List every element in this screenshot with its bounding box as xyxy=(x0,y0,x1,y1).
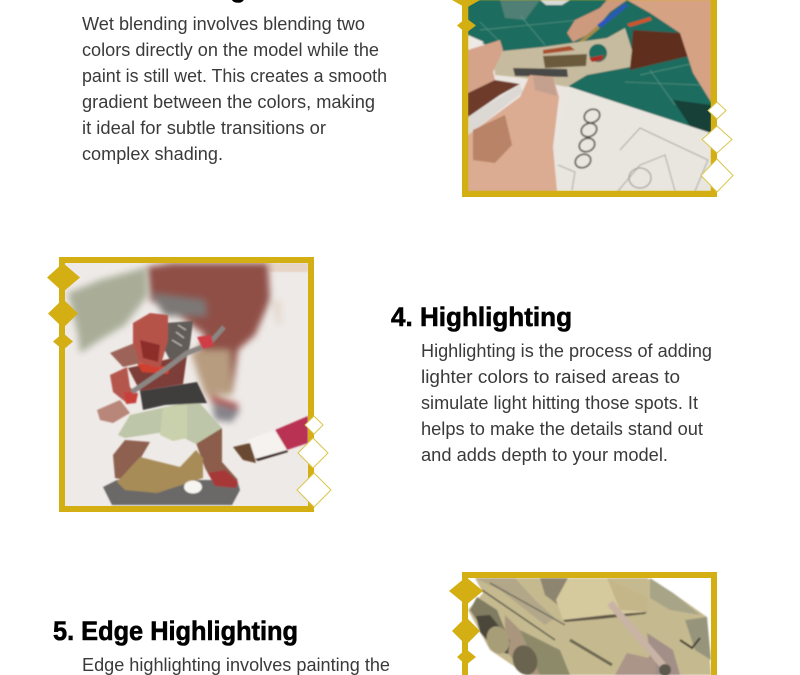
section 5 image: camouflaged tank xyxy=(449,572,717,675)
left arm xyxy=(110,367,138,404)
base xyxy=(103,480,240,505)
body text: highlighting: simulate light hitting those spots. It xyxy=(421,393,698,413)
body text: wet blending: complex shading. xyxy=(82,144,223,164)
instruction sheet details xyxy=(573,107,602,170)
left shoulder xyxy=(110,342,141,367)
deck lines xyxy=(482,590,555,640)
sword and arm xyxy=(132,327,224,392)
grass xyxy=(117,450,203,493)
body text: wet blending: gradient between the colors, making xyxy=(82,92,375,112)
stone xyxy=(184,480,202,494)
white diamonds xyxy=(297,416,331,507)
photo xyxy=(468,578,711,675)
body text: wet blending: colors directly on the model while the xyxy=(82,40,379,60)
cutting mat xyxy=(468,0,711,133)
gold frame xyxy=(59,257,314,512)
brush xyxy=(597,3,628,28)
section 3: wet blending text xyxy=(53,0,387,164)
section 4 image: painted miniature figure xyxy=(47,257,331,512)
paper scrap xyxy=(468,34,485,44)
body text: highlighting: Highlighting is the process of adding xyxy=(421,341,712,361)
section 3 image: hands painting model on cutting mat xyxy=(452,0,733,197)
craft knife xyxy=(468,85,523,135)
white diamonds xyxy=(701,102,733,192)
photo xyxy=(468,0,711,191)
body text: highlighting: and adds depth to your model. xyxy=(421,445,668,465)
model part xyxy=(493,28,632,87)
thumb and palm xyxy=(468,75,559,191)
left hand upper xyxy=(468,40,503,93)
camouflage patches xyxy=(540,578,568,605)
gold frame xyxy=(462,0,717,197)
section 4 text: highlighting xyxy=(391,302,712,465)
gold diamonds xyxy=(449,577,483,665)
photo xyxy=(65,263,308,506)
gold frame xyxy=(462,572,717,675)
body text: highlighting xyxy=(421,341,712,465)
turret xyxy=(556,578,647,620)
top finger xyxy=(567,0,627,42)
body text: wet blending: Wet blending involves blending two xyxy=(82,14,365,34)
gold diamonds xyxy=(47,263,80,350)
body text: wet blending xyxy=(82,14,387,164)
brown background xyxy=(630,30,693,70)
body text: edge highlighting: Edge highlighting involves painting the xyxy=(82,655,390,675)
rock in hand xyxy=(97,400,130,423)
paper sheet xyxy=(553,87,711,191)
body text: highlighting: helps to make the details stand out xyxy=(421,419,703,439)
right shoulder xyxy=(162,321,193,360)
wheels xyxy=(476,615,510,654)
belt xyxy=(140,382,207,410)
section 5 text: edge highlighting xyxy=(53,616,390,675)
torso xyxy=(128,355,187,391)
heading: 4. Highlighting: 4. Highlighting xyxy=(391,302,572,332)
blurred background figure xyxy=(147,263,282,422)
legs xyxy=(113,440,150,480)
right hand xyxy=(627,0,711,102)
paint brush xyxy=(233,416,308,463)
heading: 5. Edge Highlighting: 5. Edge Highlighting xyxy=(53,616,298,646)
body text: wet blending: paint is still wet. This creates a smooth xyxy=(82,66,387,86)
head xyxy=(133,313,168,368)
trousers xyxy=(118,400,222,444)
body text: wet blending: it ideal for subtle transitions or xyxy=(82,118,326,138)
gold diamonds xyxy=(452,0,480,8)
body text: highlighting: lighter colors to raised areas to xyxy=(421,367,680,387)
barrel xyxy=(610,603,667,670)
hull xyxy=(468,578,711,675)
cape xyxy=(68,267,148,353)
